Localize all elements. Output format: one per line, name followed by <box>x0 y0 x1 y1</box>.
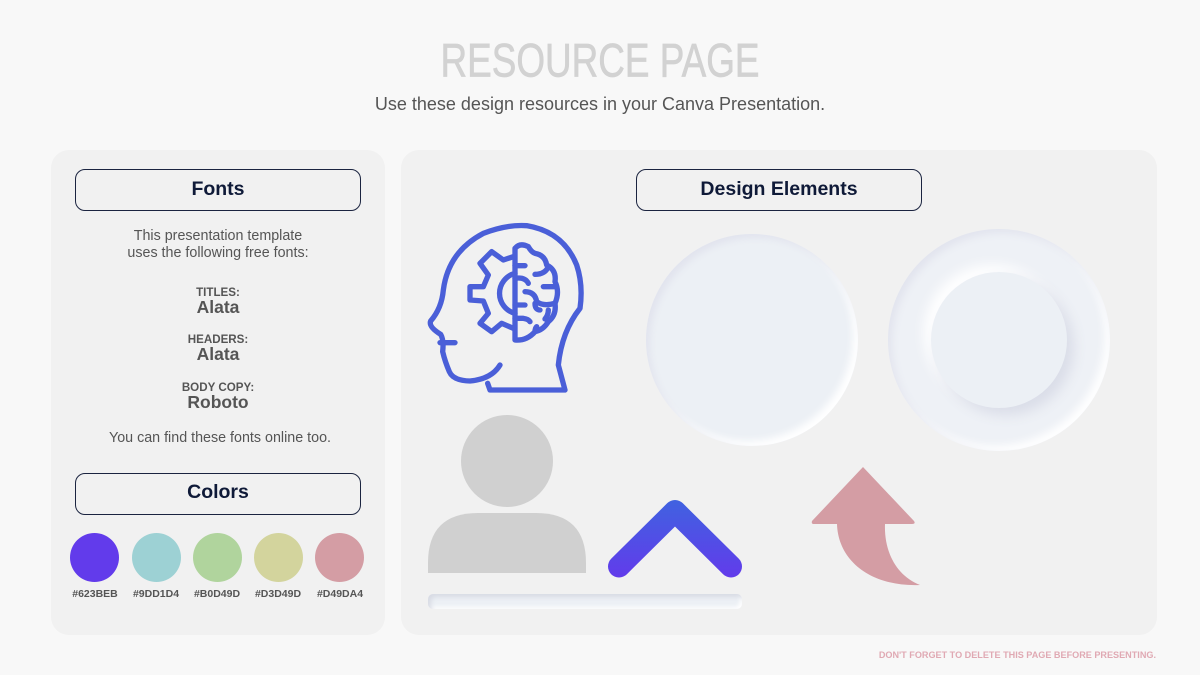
label: B0D49D: #B0D49D <box>194 588 240 600</box>
heading: colors <box>75 473 361 515</box>
text: headers font: Alata <box>197 344 239 364</box>
swatch: 623BEB <box>70 533 119 582</box>
text: font intro: This presentation template <box>134 228 302 244</box>
swatch: 9DD1D4 <box>132 533 181 582</box>
circle: neumorphic ring with raised disc <box>888 229 1110 451</box>
label: 9DD1D4: #9DD1D4 <box>133 588 179 600</box>
arrow: curved up pink <box>812 467 920 586</box>
label: D49DA4: #D49DA4 <box>317 588 363 600</box>
label: 623BEB: #623BEB <box>72 588 118 600</box>
heading: fonts <box>75 169 361 211</box>
text: font intro: uses the following free fonts: <box>127 244 309 260</box>
panel: fonts and colors <box>51 150 385 635</box>
footnote: DON'T FORGET TO DELETE THIS PAGE BEFORE PRESENTING. <box>879 650 1156 660</box>
subtitle: Use these design resources in your Canva Presentation. <box>375 94 825 114</box>
raised inner disc <box>931 272 1067 408</box>
icon: chevron up <box>608 500 742 578</box>
swatch: D49DA4 <box>315 533 364 582</box>
heading: fonts: Fonts <box>191 178 245 200</box>
circle: inset neumorphic <box>646 234 858 446</box>
text: body copy font: Roboto <box>187 392 249 412</box>
label: D3D49D: #D3D49D <box>255 588 301 600</box>
text: headers font: HEADERS: <box>188 333 248 346</box>
text: titles font: TITLES: <box>196 286 240 299</box>
text: body copy font: BODY COPY: <box>182 381 254 394</box>
inset bar <box>428 594 742 609</box>
heading: design elements <box>636 169 922 211</box>
text: titles font: Alata <box>197 297 239 317</box>
icon: head with gear and brain <box>428 222 584 393</box>
text: headers font <box>188 333 248 364</box>
text: font intro <box>127 228 309 260</box>
icon: person <box>428 415 586 573</box>
swatch: D3D49D <box>254 533 303 582</box>
swatch: B0D49D <box>193 533 242 582</box>
panel: design elements <box>401 150 1157 635</box>
text: body copy font <box>182 381 254 412</box>
text: titles font <box>196 286 240 317</box>
heading: colors: Colors <box>187 481 249 503</box>
text: fonts online note: You can find these fonts online too. <box>109 430 331 446</box>
heading: design elements: Design Elements <box>700 178 858 200</box>
